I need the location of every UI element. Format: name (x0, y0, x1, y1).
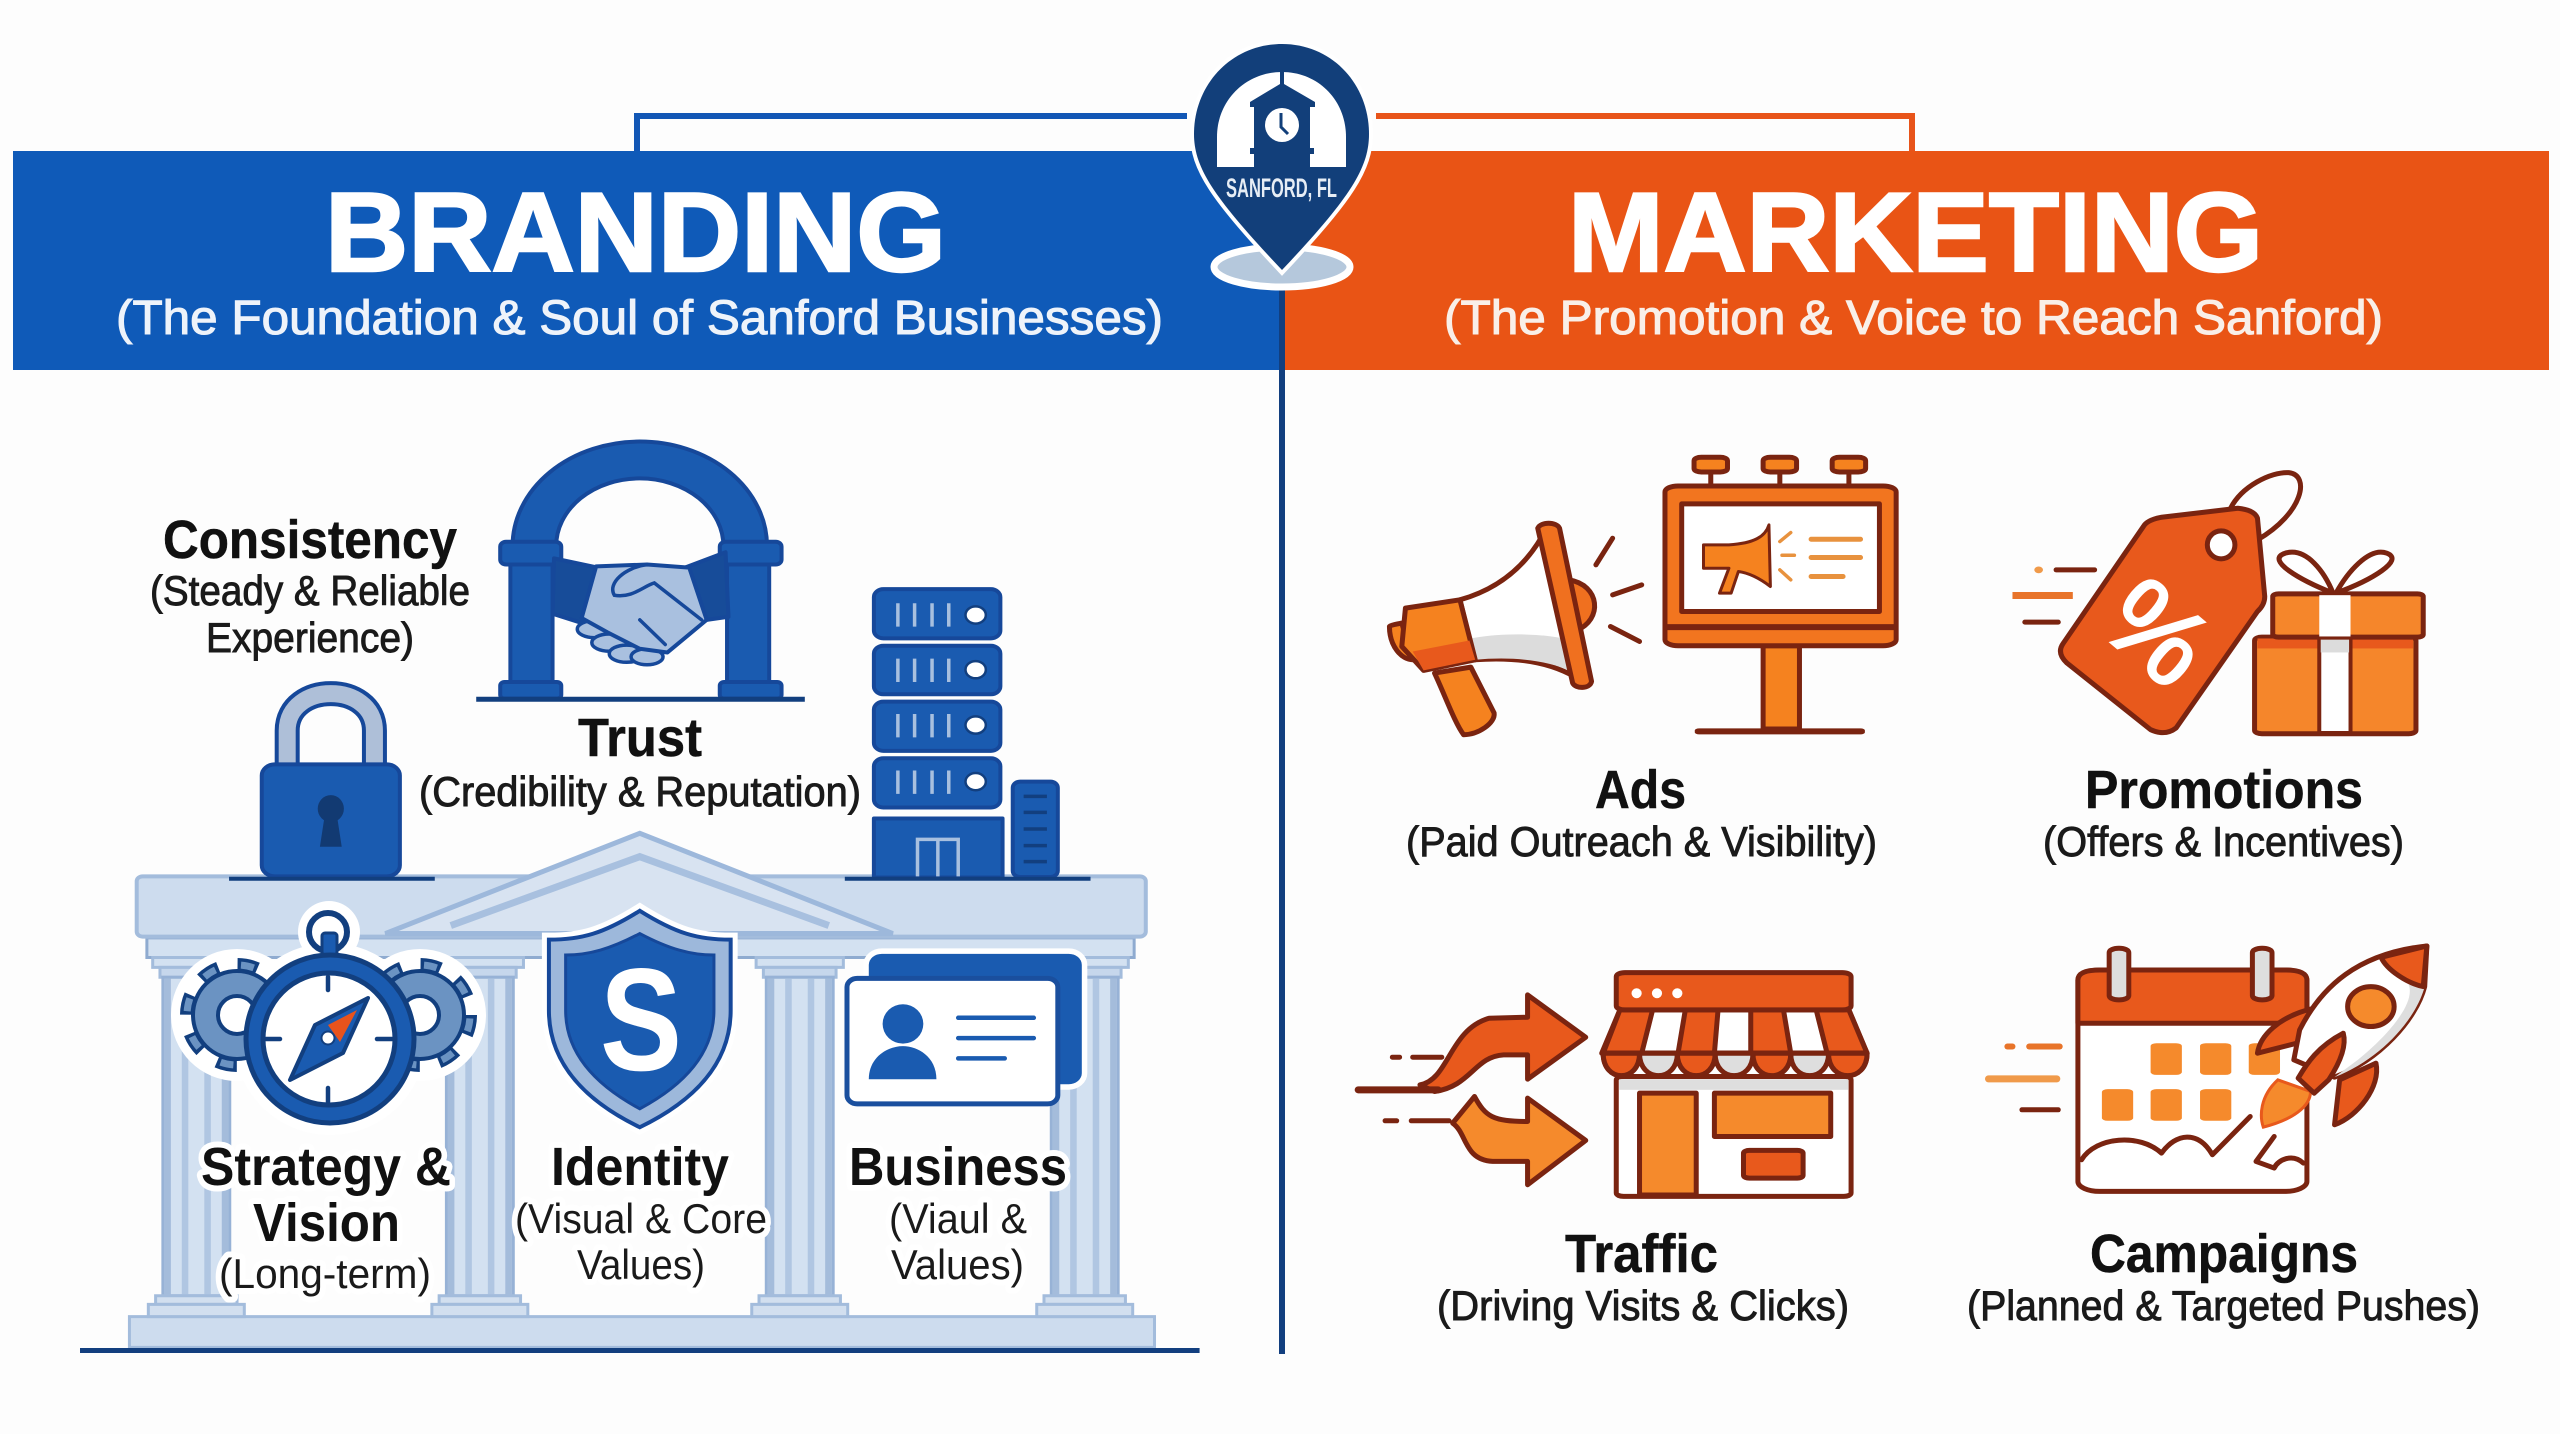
pediment (385, 833, 893, 934)
icon: arch and handshake (476, 442, 805, 699)
base and ground (80, 1317, 1200, 1350)
label: business (849, 1137, 1067, 1288)
label: strategy and vision: (Long-term) (219, 1250, 431, 1297)
label: business: (Viaul & (889, 1195, 1027, 1242)
label: ads (1406, 760, 1877, 865)
banner: marketing (1285, 151, 2549, 370)
icon: location pin (1194, 44, 1369, 287)
label: promotions: (Offers & Incentives) (2043, 818, 2404, 865)
pin label: SANFORD, FL (1226, 173, 1337, 203)
label: trust: Trust (578, 708, 702, 768)
label: trust (419, 708, 861, 815)
icon: storefront (1600, 973, 1868, 1196)
label: ads: (Paid Outreach & Visibility) (1406, 818, 1877, 865)
shield letter: S (600, 938, 682, 1101)
label: traffic: (Driving Visits & Clicks) (1437, 1282, 1849, 1329)
top connector: blue (637, 116, 1187, 151)
label: campaigns: (Planned & Targeted Pushes) (1967, 1282, 2480, 1329)
icon: billboard (1665, 457, 1896, 734)
icons: ads and promotions (1389, 457, 2423, 735)
label: campaigns: Campaigns (2090, 1224, 2358, 1284)
columns (147, 938, 1134, 1317)
label: identity: Values) (577, 1241, 705, 1288)
label: promotions (2043, 760, 2404, 865)
label: business: Business (849, 1137, 1067, 1197)
label: identity: (Visual & Core (515, 1195, 767, 1242)
icon: price tag (2012, 473, 2301, 733)
icon: rocket (2257, 946, 2427, 1127)
label: identity (515, 1137, 767, 1288)
heading: marketing: MARKETING (1568, 170, 2263, 295)
label: consistency (150, 510, 470, 661)
icon: compass with gears (171, 901, 486, 1135)
label: trust: (Credibility & Reputation) (419, 768, 861, 815)
subtitle: branding: (The Foundation & Soul of Sanford Businesses) (116, 292, 1163, 345)
panel: marketing (1358, 457, 2480, 1329)
label: strategy and vision (201, 1137, 451, 1297)
label: strategy and vision: Strategy & (201, 1137, 451, 1197)
icon: megaphone (1389, 523, 1642, 735)
label: identity: Identity (551, 1137, 729, 1197)
label: promotions: Promotions (2085, 760, 2363, 820)
panel: branding temple (80, 442, 1200, 1350)
label: strategy and vision: Vision (253, 1193, 400, 1253)
cornice (137, 876, 1146, 937)
label: ads: Ads (1595, 760, 1686, 820)
label: traffic: Traffic (1565, 1224, 1718, 1284)
temple illustration (80, 442, 1200, 1350)
center divider (1279, 280, 1285, 1354)
label: consistency: Experience) (206, 614, 414, 661)
icon: calendar (1988, 948, 2307, 1191)
percent sign: % (2080, 554, 2234, 711)
label: campaigns (1967, 1224, 2480, 1329)
banner: branding (13, 151, 1280, 370)
subtitle: marketing: (The Promotion & Voice to Reach Sanford) (1444, 292, 2383, 345)
icon: traffic arrows (1358, 995, 1586, 1185)
top connector: orange (1376, 116, 1912, 151)
icon: id card (847, 954, 1082, 1104)
label: consistency: (Steady & Reliable (150, 567, 470, 614)
icon: server tower (845, 589, 1091, 879)
label: consistency: Consistency (163, 510, 457, 570)
icon: shield (549, 911, 731, 1127)
label: business: Values) (891, 1241, 1024, 1288)
heading: branding: BRANDING (325, 170, 946, 295)
icon: padlock (229, 694, 435, 879)
label: traffic (1437, 1224, 1849, 1329)
icon: gift box (2255, 552, 2423, 734)
icons: traffic and campaigns (1358, 946, 2427, 1196)
